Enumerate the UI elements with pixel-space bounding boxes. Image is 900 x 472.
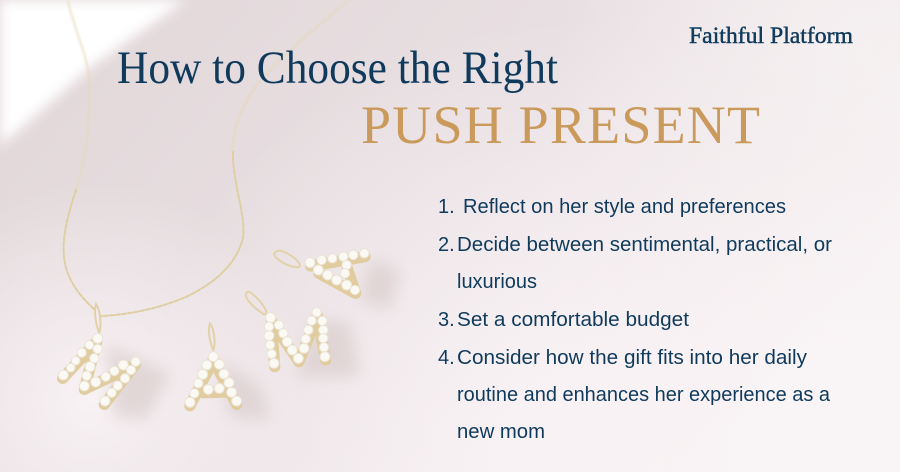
tip 4: 4. — [438, 347, 455, 369]
logo: Faithful Platform: Faithful Platform — [689, 23, 853, 48]
pendant: letter M left — [58, 304, 140, 406]
tip 2 — [438, 234, 832, 293]
tip 1: Reflect on her style and preferences — [463, 196, 786, 218]
tip 3: 3. — [438, 309, 455, 331]
pendant shadows — [107, 260, 400, 420]
tip 4 — [438, 347, 831, 443]
tip 2: luxurious — [457, 271, 537, 293]
tip 1: 1. — [438, 196, 455, 218]
tip 2: Decide between sentimental, practical, or — [457, 234, 832, 256]
tip 4: routine and enhances her experience as a — [457, 384, 831, 406]
numbered list of tips — [438, 196, 832, 443]
pendant: letter A centre — [185, 323, 242, 407]
pendant: letter M right — [246, 292, 330, 368]
tip 2: 2. — [438, 234, 455, 256]
tip 4: Consider how the gift fits into her daily — [457, 347, 807, 369]
tip 3: Set a comfortable budget — [457, 309, 689, 331]
title line: How to Choose the Right: How to Choose the Right — [117, 42, 558, 94]
tip 4: new mom — [457, 421, 545, 443]
white fabric corner — [0, 0, 186, 146]
title line: PUSH PRESENT: PUSH PRESENT — [361, 95, 760, 155]
necklace chain — [64, 1, 348, 316]
pendant: letter A upper right — [274, 249, 369, 295]
